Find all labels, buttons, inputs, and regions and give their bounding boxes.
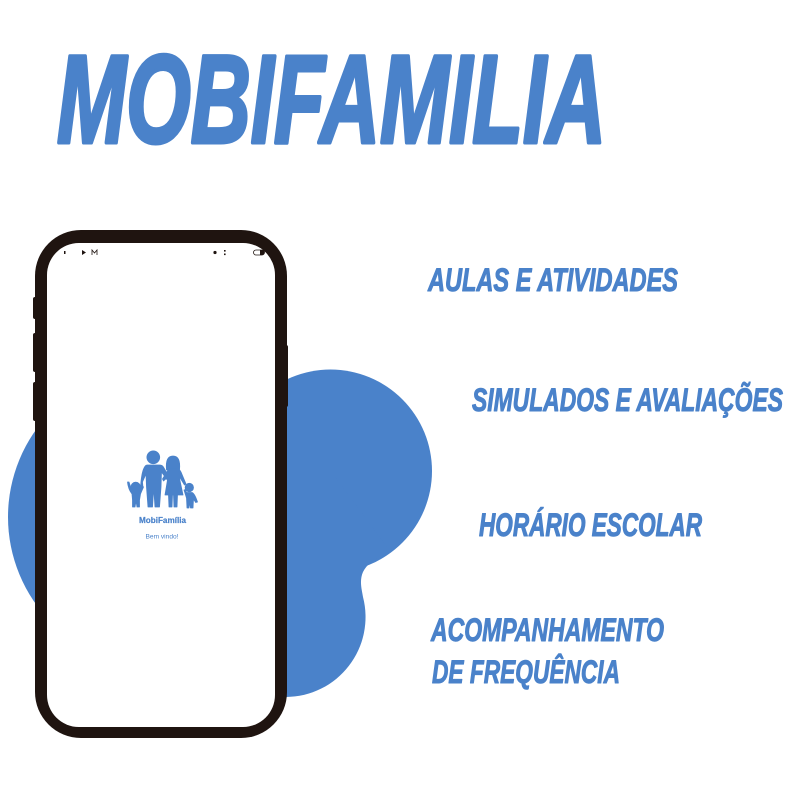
feature: aulas e atividades: AULAS E ATIVIDADES xyxy=(427,262,678,298)
mother xyxy=(162,456,186,507)
welcome text: Bem vindo! xyxy=(146,534,179,540)
child left xyxy=(128,482,144,507)
feature: acompanhamento de frequência: ACOMPANHAMENTO xyxy=(430,612,664,648)
phone side buttons xyxy=(33,297,288,421)
icon: family xyxy=(128,451,198,508)
app name: MobiFamília xyxy=(139,516,187,525)
phone xyxy=(33,230,288,738)
feature: acompanhamento de frequência: DE FREQUÊNCIA xyxy=(432,654,620,690)
child right xyxy=(184,483,198,508)
background blob xyxy=(8,367,432,697)
phone body xyxy=(35,230,287,738)
status bar icons xyxy=(64,250,264,255)
phone screen xyxy=(47,243,275,727)
feature: horário escolar: HORÁRIO ESCOLAR xyxy=(479,507,702,543)
feature: acompanhamento de frequência xyxy=(430,612,664,690)
father xyxy=(140,451,170,507)
